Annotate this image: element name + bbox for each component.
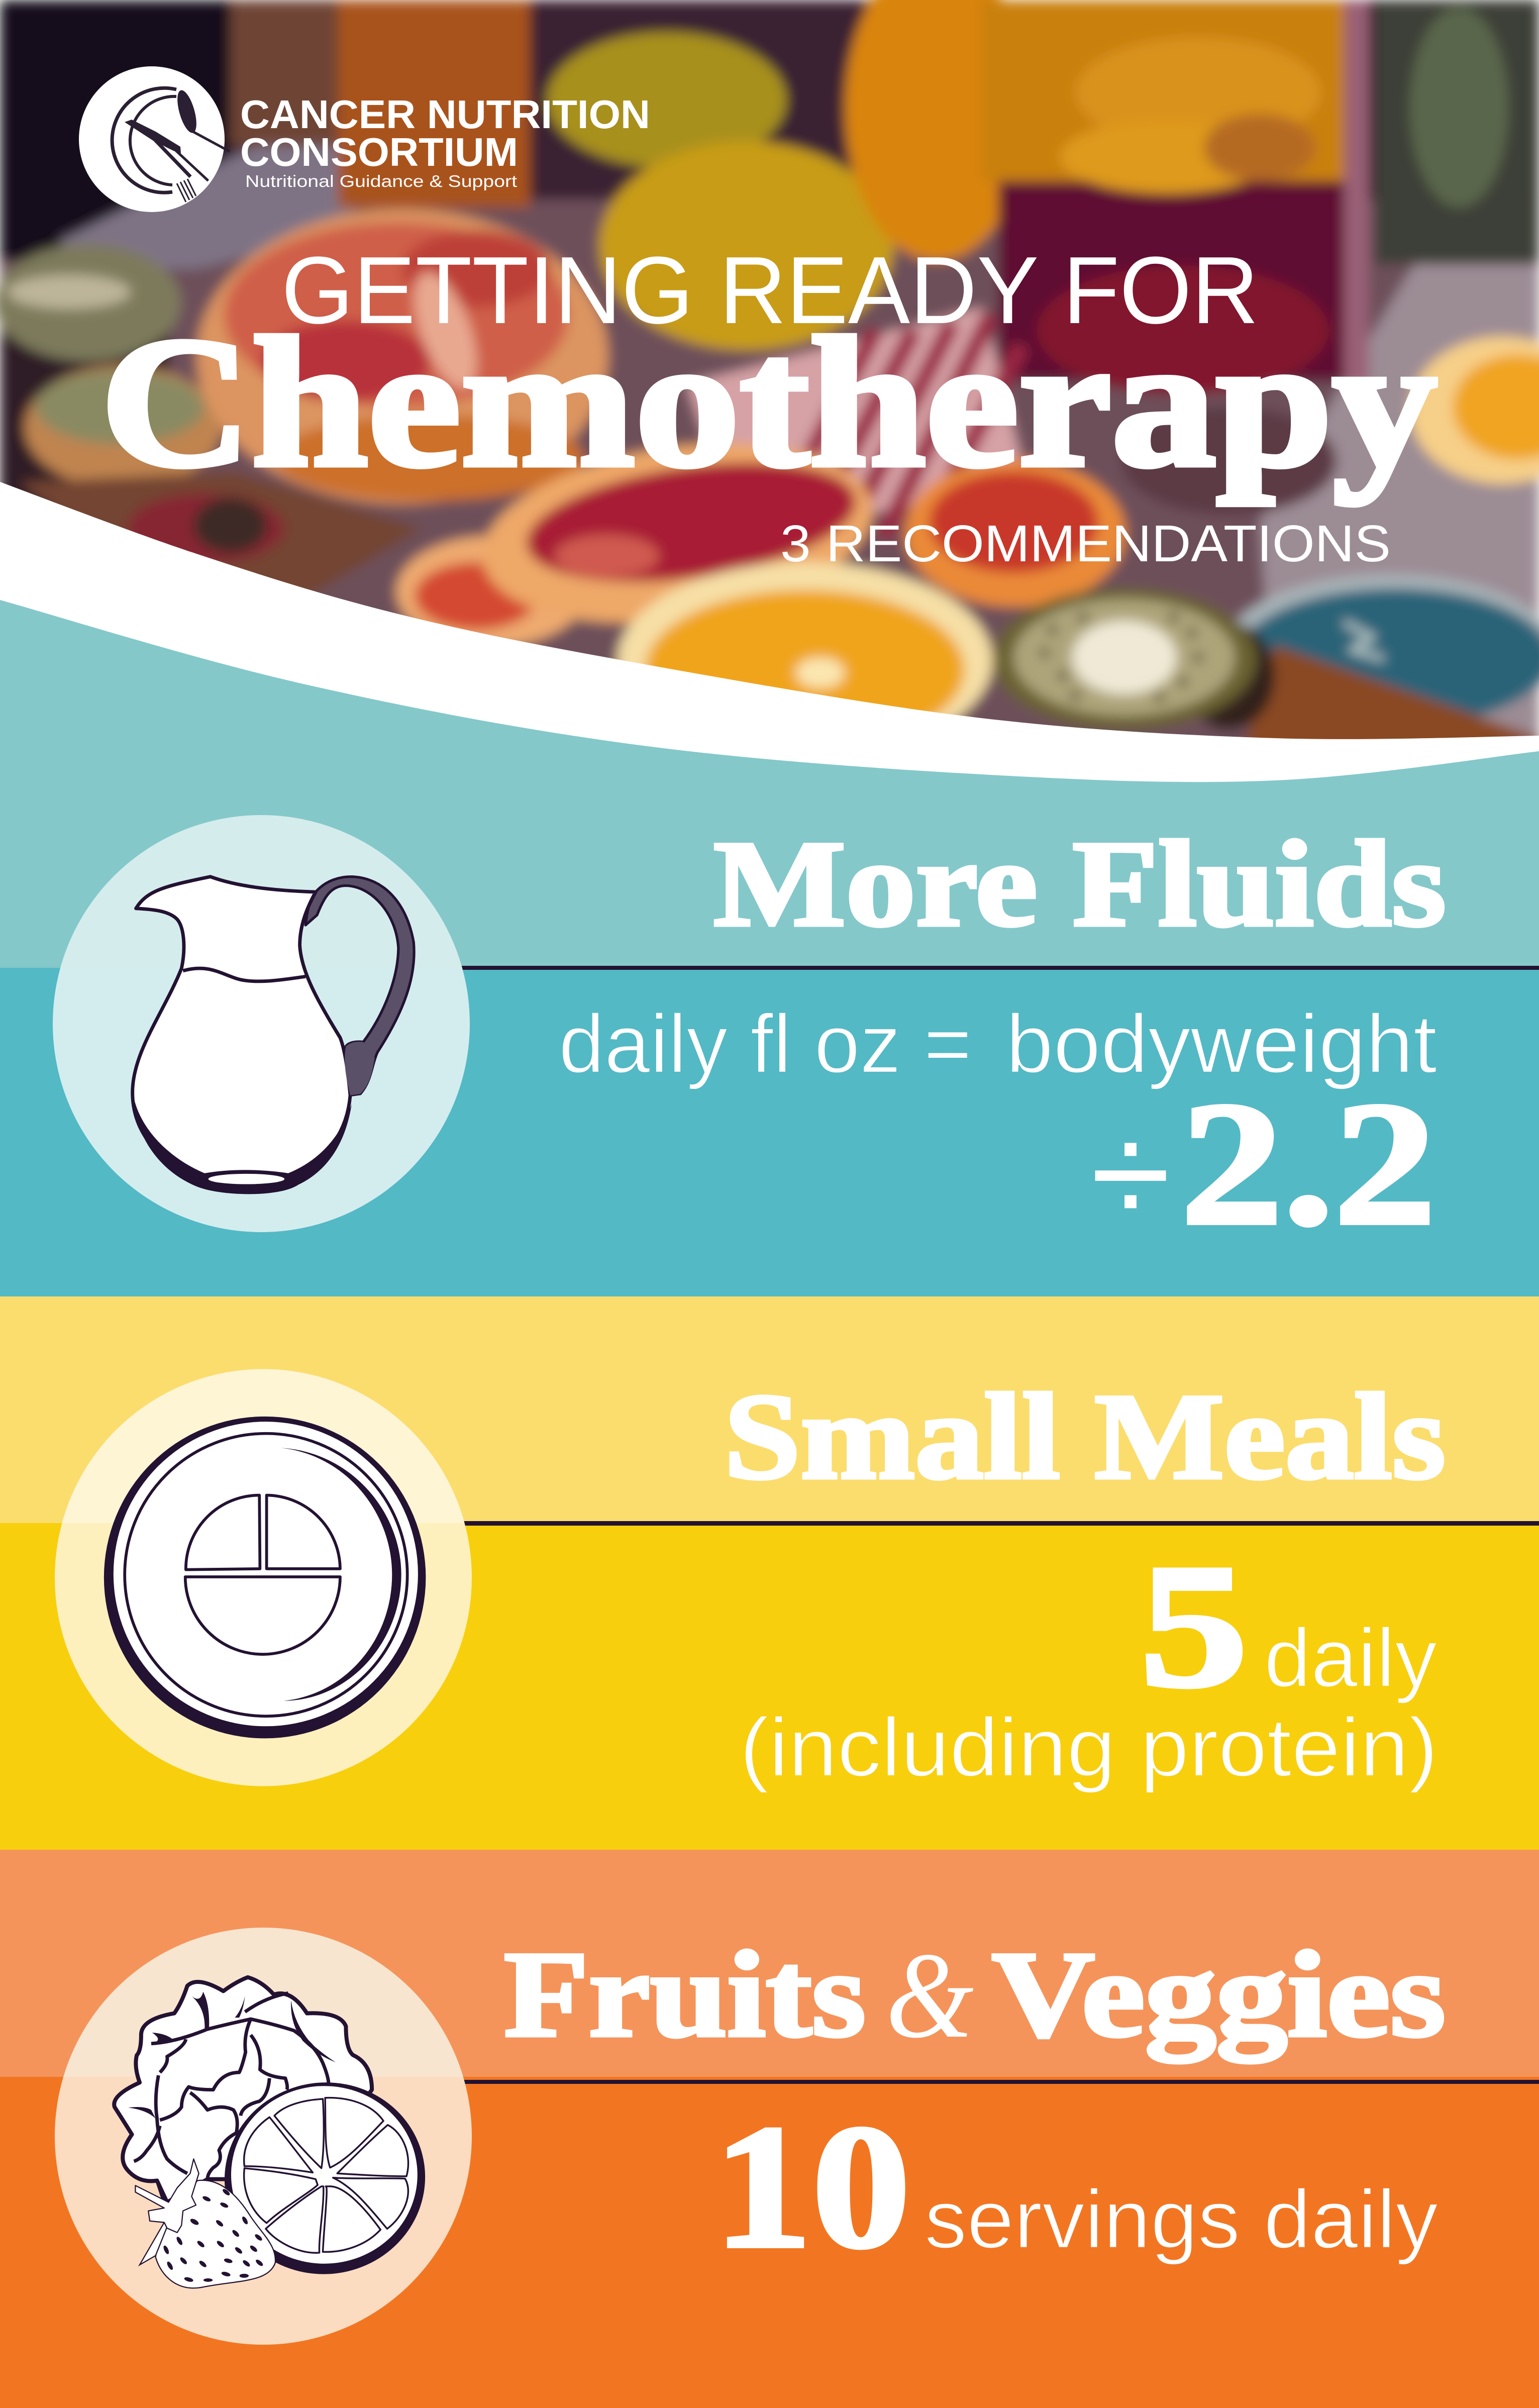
teal section: more fluids bbox=[0, 600, 1539, 1296]
logo wordmark: CONSORTIUM bbox=[240, 130, 518, 174]
formula value: divide by 2.2: ÷ bbox=[1090, 1092, 1171, 1255]
heading: Fruits & Veggies: Veggies bbox=[992, 1926, 1446, 2063]
heading: More Fluids: More Fluids bbox=[713, 816, 1446, 952]
note: including protein: (including protein) bbox=[740, 1701, 1438, 1793]
yellow section: small meals bbox=[0, 1296, 1539, 1850]
logo wordmark: Nutritional Guidance & Support bbox=[245, 172, 517, 190]
value: 5 daily: daily bbox=[1264, 1612, 1437, 1704]
icon: lettuce, orange slice and strawberry bbox=[114, 1977, 438, 2288]
heading: Fruits & Veggies bbox=[504, 1926, 1446, 2063]
formula value: divide by 2.2: 2.2 bbox=[1181, 1066, 1436, 1262]
divider bbox=[452, 1521, 1539, 1526]
value: 10 servings daily: servings daily bbox=[925, 2173, 1439, 2265]
value: 5 daily bbox=[1140, 1528, 1437, 1724]
formula text: daily fl oz = bodyweight bbox=[559, 997, 1437, 1090]
value: 10 servings daily bbox=[713, 2089, 1439, 2285]
divider bbox=[452, 2080, 1539, 2084]
formula text: daily fl oz = bodyweight: bodyweight bbox=[1006, 997, 1437, 1090]
orange section: fruits and veggies bbox=[0, 1850, 1539, 2408]
heading: Fruits & Veggies: & bbox=[886, 1927, 974, 2063]
icon: plate with cutlery bbox=[79, 66, 230, 212]
value: 5 daily: 5 bbox=[1140, 1528, 1248, 1724]
circle backdrop bbox=[53, 815, 470, 1232]
title: Chemotherapy: Chemotherapy bbox=[100, 299, 1437, 506]
icon: water pitcher bbox=[133, 877, 414, 1194]
logo wordmark: CANCER NUTRITION bbox=[240, 92, 650, 137]
hero photo: citrus fruit and iced drink bbox=[0, 0, 1539, 799]
circle backdrop bbox=[55, 1928, 472, 2345]
formula text: daily fl oz = bodyweight: daily fl oz = bbox=[559, 997, 972, 1090]
formula value: divide by 2.2 bbox=[1090, 1066, 1436, 1262]
icon: divided plate bbox=[104, 1417, 426, 1738]
heading: Fruits & Veggies: Fruits bbox=[504, 1926, 866, 2062]
divider bbox=[452, 966, 1539, 970]
logo: Cancer Nutrition Consortium bbox=[79, 66, 650, 212]
subtitle: 3 recommendations: 3 RECOMMENDATIONS bbox=[780, 515, 1391, 572]
circle backdrop bbox=[55, 1369, 472, 1786]
value: 10 servings daily: 10 bbox=[713, 2089, 910, 2285]
logo wordmark bbox=[240, 92, 650, 190]
heading: Small Meals: Small Meals bbox=[724, 1368, 1446, 1504]
strawberry bbox=[135, 2159, 275, 2288]
lettuce bbox=[114, 1977, 372, 2202]
orange slice bbox=[212, 2069, 438, 2287]
title: Getting Ready For: GETTING READY FOR bbox=[281, 237, 1259, 344]
